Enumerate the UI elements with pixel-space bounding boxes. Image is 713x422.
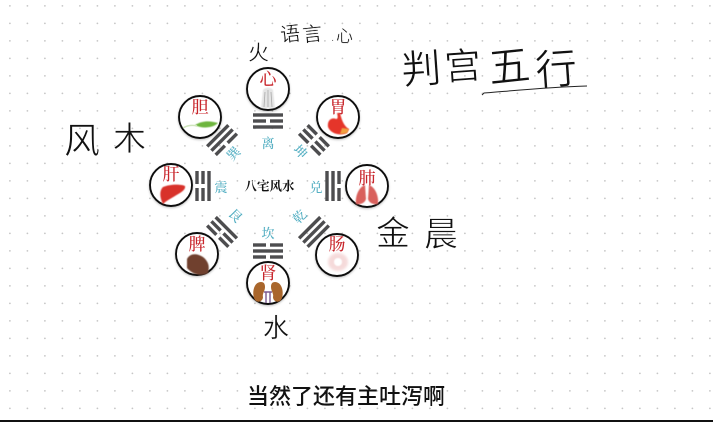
organ: gallbladder (179, 96, 221, 138)
label: zhen: 震 (214, 180, 228, 195)
handwriting: language heart: 语 (279, 22, 301, 47)
trigram: xun upper left (206, 124, 238, 156)
organ: lung (346, 165, 388, 207)
organ: gallbladder: 胆 (192, 98, 208, 117)
label: kun: 坤 (290, 142, 310, 162)
trigram: kun upper right (298, 124, 330, 156)
organ: intestine (316, 234, 358, 276)
organ: liver: 肝 (162, 165, 180, 184)
organ: intestine: 肠 (328, 235, 346, 254)
handwriting: title: 判 (400, 47, 443, 93)
organ: stomach: 胃 (330, 98, 346, 117)
trigram: dui right (325, 171, 341, 201)
organ: heart (247, 68, 289, 110)
handwriting: metal: 金 (376, 215, 410, 253)
trigram: gen lower left (206, 216, 238, 248)
handwriting: language heart: 言 (301, 22, 323, 47)
handwriting: wind wood: 风 (64, 120, 100, 161)
center title: 八宅风水 (244, 178, 295, 194)
label: dui: 兑 (309, 180, 323, 195)
bottom rule (0, 420, 713, 422)
handwriting: title: 宫 (443, 45, 483, 88)
label: li: 离 (261, 136, 275, 151)
organ: spleen: 脾 (188, 235, 206, 254)
handwriting: fire: 火 (248, 42, 269, 65)
handwriting: language heart: 心 (336, 27, 353, 46)
subtitle caption: 当然了还有主吐泻啊 (247, 384, 445, 409)
handwriting: water: 水 (263, 313, 289, 343)
label: gen: 艮 (225, 206, 245, 226)
organ: spleen (176, 233, 218, 275)
trigram names (214, 136, 323, 241)
trigram: qian lower right (298, 216, 330, 248)
handwriting: metal: 晨 (424, 216, 458, 254)
trigram: zhen left (195, 171, 211, 201)
organ: kidney (247, 262, 289, 304)
handwriting: wind wood: 木 (113, 120, 146, 157)
handwriting: title: 五 (486, 41, 532, 92)
handwriting: language heart (279, 22, 353, 47)
handwriting: metal (376, 215, 458, 254)
organ: stomach (317, 96, 359, 138)
organ: heart: 心 (260, 70, 278, 89)
label: xun: 巽 (224, 143, 244, 164)
handwriting: language heart: . (331, 30, 334, 44)
label: kan: 坎 (261, 226, 275, 241)
organ: lung: 肺 (358, 169, 376, 188)
handwriting: title underline (482, 86, 587, 95)
handwriting: title (400, 41, 579, 94)
trigram: li top (253, 113, 283, 129)
trigram ring (195, 113, 341, 259)
organ: liver (150, 164, 192, 206)
organ: kidney: 肾 (260, 264, 276, 283)
label: qian: 乾 (290, 207, 310, 227)
trigram: kan bottom (253, 243, 283, 259)
handwriting: title: 行 (534, 45, 579, 94)
handwriting: wind wood (64, 120, 146, 161)
